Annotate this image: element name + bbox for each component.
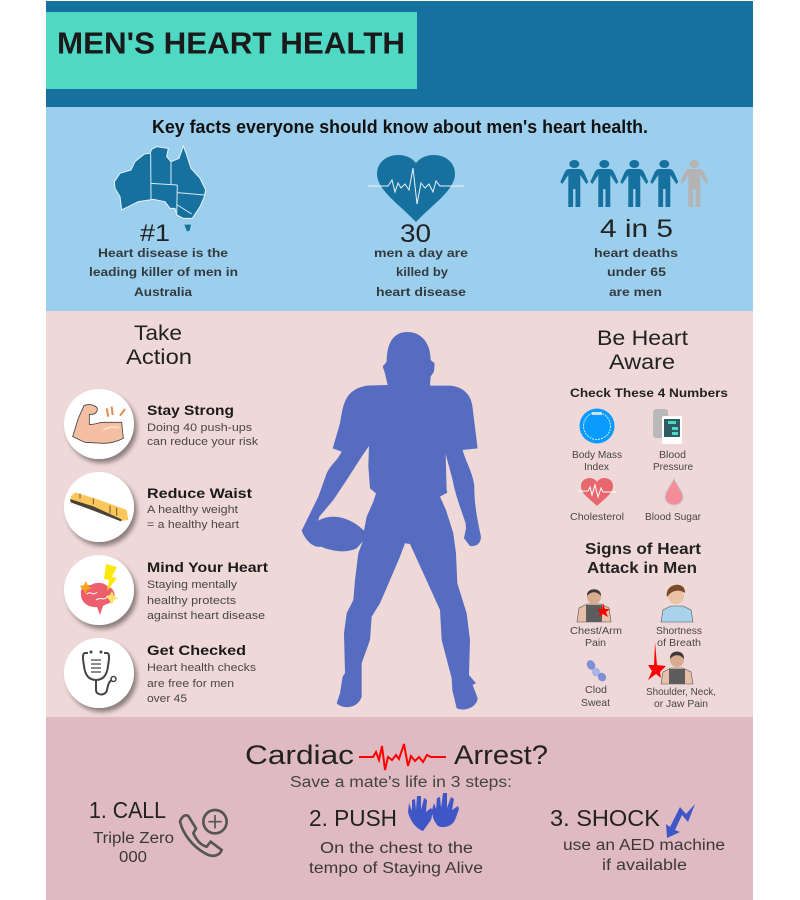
- heading: take action: Take: [134, 322, 182, 345]
- text: reduce waist: [147, 486, 253, 531]
- text: stay strong: can reduce your risk: [147, 436, 259, 448]
- panel: key facts: [46, 107, 753, 311]
- icon: man with shoulder pain: [648, 642, 693, 684]
- icon: Australia map: [114, 146, 206, 231]
- text: reduce waist: Reduce Waist: [147, 486, 253, 501]
- text: mind your heart: Staying mentally: [147, 579, 238, 591]
- text: reduce waist: = a healthy heart: [147, 519, 239, 531]
- icon: man with chest pain: [577, 589, 611, 622]
- text: men a day: heart disease: [376, 287, 466, 299]
- item: body mass index: [572, 408, 622, 473]
- item: shortness of breath: of Breath: [657, 637, 701, 649]
- text: heart disease leading killer: [89, 248, 238, 299]
- item: shoulder neck or jaw pain: Shoulder, Neck,: [646, 686, 716, 698]
- icon: heart with pulse: [368, 155, 464, 222]
- step 2: push: [309, 793, 483, 877]
- text: heart deaths under 65: under 65: [607, 267, 667, 279]
- text: mind your heart: Mind Your Heart: [147, 560, 269, 575]
- step 2: push: 2. PUSH: [309, 805, 397, 831]
- icon: sweat drops: [585, 659, 608, 683]
- text: men a day: men a day are: [374, 248, 468, 260]
- heading: cardiac arrest: Arrest?: [454, 740, 548, 770]
- text: heart disease leading killer: leading killer of men in: [89, 267, 238, 279]
- step 1: call: 000: [119, 849, 147, 866]
- icon: man short of breath: [661, 585, 693, 622]
- text: reduce waist: A healthy weight: [147, 504, 238, 516]
- item: shortness of breath: [656, 585, 702, 649]
- icon: blood drop: [665, 478, 683, 505]
- item: cold sweat: [581, 659, 610, 709]
- text: stay strong: Stay Strong: [147, 403, 234, 418]
- heading: signs of heart attack: Attack in Men: [587, 560, 697, 577]
- icon: heart with pulse: [578, 478, 616, 506]
- heading: take action: Action: [126, 346, 192, 369]
- item: cholesterol: Cholesterol: [570, 511, 624, 523]
- panel: header band: [46, 1, 753, 107]
- panel: cardiac arrest: [46, 717, 753, 900]
- step 3: shock: use an AED machine: [563, 837, 725, 854]
- icon: measuring tape: [64, 472, 134, 542]
- icon: flexed arm: [64, 389, 134, 459]
- item: cold sweat: Sweat: [581, 697, 610, 709]
- step 3: shock: [550, 804, 725, 874]
- item: blood pressure: [653, 409, 693, 473]
- text: stay strong: Doing 40 push-ups: [147, 422, 253, 434]
- item: blood sugar: [645, 478, 701, 523]
- heading: check these 4 numbers: Check These 4 Numbers: [570, 386, 728, 400]
- subheading: Save a mate's life in 3 steps:: [290, 774, 512, 791]
- item: chest or arm pain: Chest/Arm: [570, 625, 622, 637]
- icon: five people, four highlighted: [560, 160, 708, 207]
- text: heart deaths under 65: heart deaths: [594, 248, 678, 260]
- item: blood pressure: Blood: [659, 449, 686, 461]
- text: get checked: over 45: [147, 693, 187, 705]
- text: mind your heart: against heart disease: [147, 610, 265, 622]
- text: men a day: [374, 248, 468, 299]
- text: stay strong: [147, 403, 259, 448]
- item: mind your heart: [64, 555, 269, 625]
- step 3: shock: if available: [602, 857, 687, 874]
- title: [46, 12, 417, 89]
- item: shortness of breath: Shortness: [656, 625, 702, 637]
- item: get checked: [64, 638, 257, 708]
- heading: be heart aware: [597, 327, 688, 374]
- text: heart disease leading killer: Heart disease is the: [98, 248, 228, 260]
- heading: signs of heart attack: [585, 541, 701, 577]
- icon: lightning arrow: [666, 804, 695, 838]
- text: heart deaths under 65: [594, 248, 678, 299]
- item: chest or arm pain: Pain: [585, 637, 606, 649]
- text: heart deaths under 65: are men: [609, 287, 662, 299]
- stat: four in five: 4 in 5: [600, 215, 673, 243]
- text: get checked: Get Checked: [147, 643, 246, 658]
- step 2: push: On the chest to the: [320, 840, 473, 857]
- text: heart disease leading killer: Australia: [134, 287, 193, 299]
- icon: blue hands: [408, 793, 459, 831]
- item: stay strong: [64, 389, 259, 459]
- panel: take action and be heart aware: [46, 311, 753, 717]
- step 1: call: Triple Zero: [93, 830, 174, 847]
- item: blood sugar: Blood Sugar: [645, 511, 701, 523]
- step 3: shock: 3. SHOCK: [550, 805, 661, 831]
- heading: be heart aware: Be Heart: [597, 327, 688, 350]
- step 2: push: tempo of Staying Alive: [309, 860, 483, 877]
- text: get checked: Heart health checks: [147, 662, 257, 674]
- item: chest or arm pain: [570, 589, 622, 649]
- stat: number one: #1: [140, 220, 170, 247]
- key facts heading: Key facts everyone should know about men's heart health.: [152, 117, 648, 137]
- item: cold sweat: Clod: [585, 684, 607, 696]
- item: shoulder neck or jaw pain: or Jaw Pain: [654, 698, 708, 710]
- item: body mass index: Index: [584, 461, 610, 473]
- heading: signs of heart attack: Signs of Heart: [585, 541, 701, 558]
- item: reduce waist: [64, 472, 253, 542]
- title: MEN'S HEART HEALTH: [57, 26, 405, 60]
- stat: thirty: 30: [400, 220, 431, 248]
- figure: football player silhouette: [302, 332, 481, 710]
- item: blood pressure: Pressure: [653, 461, 693, 473]
- item: body mass index: Body Mass: [572, 449, 622, 461]
- item: cholesterol: [570, 478, 624, 523]
- step 1: call: [89, 797, 227, 866]
- text: get checked: are free for men: [147, 678, 234, 690]
- item: shoulder neck or jaw pain: [646, 642, 716, 710]
- step 1: call: 1. CALL: [89, 797, 166, 823]
- icon: scale: [580, 408, 614, 444]
- icon: phone with plus: [180, 810, 227, 856]
- icon: stethoscope: [64, 638, 134, 708]
- heading: be heart aware: Aware: [609, 351, 675, 374]
- text: mind your heart: [147, 560, 269, 622]
- text: get checked: [147, 643, 257, 705]
- heading: take action: [126, 322, 192, 369]
- text: men a day: killed by: [396, 267, 449, 279]
- icon: red pulse line: [359, 744, 446, 770]
- heading: cardiac arrest: Cardiac: [245, 740, 354, 770]
- heading: cardiac arrest: [245, 740, 548, 770]
- icon: blood pressure monitor: [653, 409, 682, 444]
- text: mind your heart: healthy protects: [147, 595, 237, 607]
- icon: brain with lightning: [64, 555, 134, 625]
